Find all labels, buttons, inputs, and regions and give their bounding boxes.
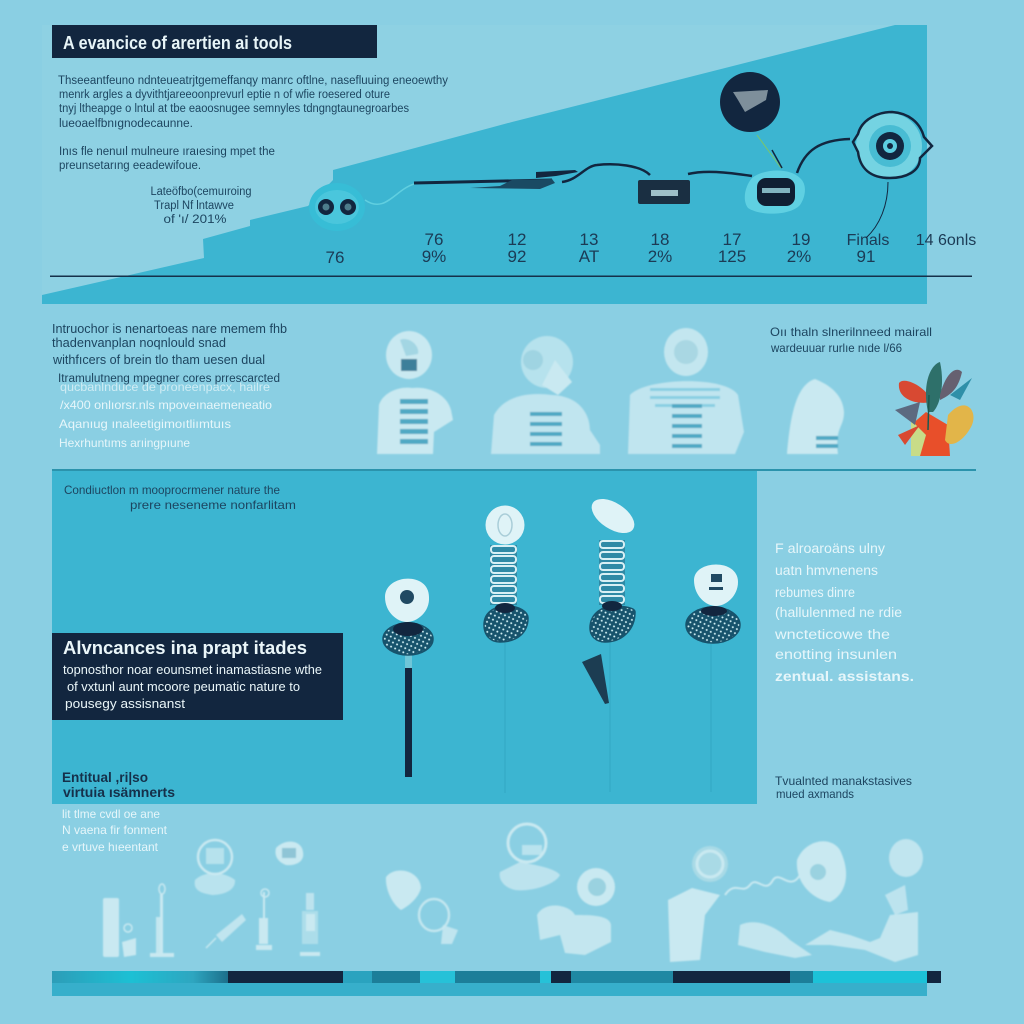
chart caption: Lateöfbo(cemuıroing [150, 186, 252, 198]
panel: advances [52, 471, 757, 804]
right white text block: (hallulenmed ne rdie [775, 605, 902, 620]
device 2 [484, 506, 528, 793]
section 2 white list: Hexrhuntıms arıingpıune [59, 436, 190, 450]
figure: robot 2 [491, 336, 600, 454]
intro text block: menrk argles a dyvithtjareeoonprevurl eptie n of wfie roesered oture [59, 89, 390, 101]
section 2 white list [59, 380, 272, 450]
icon: central hub [745, 139, 850, 214]
icon: dark circle badge [720, 72, 782, 168]
chart labels: AT [579, 247, 599, 266]
bottom illustrations: floating heads [195, 840, 458, 944]
bottom right caption: Tvualnted manakstasives [775, 774, 912, 788]
section 2 white list: qucbanlnduce de proneenpacx, hailre [60, 380, 270, 394]
chart labels: 19 [792, 230, 810, 249]
bottom white text: lit tlme cvdl oe ane [62, 807, 160, 821]
chart caption: Trapl Nf lntawve [154, 200, 234, 212]
section 2 right caption: Oıı thaln slnerilnneed mairall [770, 325, 932, 339]
bottom illustrations: figures [500, 824, 615, 955]
bottom right caption: mued axmands [776, 787, 854, 801]
section 2 intro text: Itramulutneng mpegner cores prrescarcted [58, 373, 280, 385]
right white text block: rebumes dinre [775, 585, 855, 600]
divider line [52, 469, 976, 471]
icon: rosette [853, 112, 932, 238]
device 1 [383, 579, 433, 777]
panel intro text [64, 483, 296, 512]
section 2 intro text: thadenvanplan noqnlould snad [52, 336, 226, 350]
chart labels: 76 [326, 248, 344, 267]
icon: chip [638, 172, 752, 204]
chart labels: 12 [508, 230, 526, 249]
panel intro text: prere neseneme nonfarlitam [130, 498, 296, 512]
chart labels: 76 [425, 230, 443, 249]
chart labels: 92 [508, 247, 526, 266]
section 2 right caption [770, 325, 932, 355]
navy wedge [582, 654, 609, 704]
section 2 intro text: Intruochor is nenartoeas nare memem fhb [52, 322, 287, 336]
chart labels: 9% [422, 247, 446, 266]
callout: advances in practice: Alvncances ina prapt itades [63, 638, 307, 658]
bottom colored bar [52, 971, 941, 996]
heading bar [52, 25, 377, 58]
section 2 right caption: wardeuuar rurlıe nıde l/66 [770, 341, 902, 355]
chart labels [326, 230, 976, 267]
intro text block [58, 75, 448, 172]
section 2 intro text: withfıcers of brein tlo tham uesen dual [52, 353, 265, 367]
bottom illustrations: small devices [103, 884, 320, 957]
intro text block: lueoaelfbnıgnodecaunne. [59, 118, 193, 130]
bottom heading: virtuia ısämnerts [63, 784, 175, 800]
icon: timeline network [309, 72, 932, 238]
chart labels: 13 [580, 230, 598, 249]
right white text block: uatn hmvnenens [775, 563, 878, 578]
right white text block: F alroaroäns ulny [775, 541, 885, 556]
chart labels: 125 [718, 247, 746, 266]
intro text block: Inıs fle nenuıl mulneure ıraıesing mpet the [59, 146, 275, 158]
figure: robot head profile [787, 379, 844, 454]
intro text block: Thseeantfeuno ndnteueatrjtgemeffanqy manrc oftlne, nasefluuing eneoewthy [58, 75, 448, 87]
right white text block: wncteticowe the [774, 627, 890, 642]
bottom heading [62, 769, 175, 800]
callout: advances in practice: pousegy assisnanst [65, 697, 186, 711]
panel intro text: Condiuctlon m mooprocrmener nature the [64, 483, 280, 497]
bottom white text [62, 807, 168, 854]
chart labels: 91 [857, 247, 875, 266]
chart labels: 17 [723, 230, 741, 249]
chart labels: 18 [651, 230, 669, 249]
chart labels: 2% [787, 247, 811, 266]
chart caption [150, 186, 252, 226]
figure: robot 3 [628, 328, 744, 454]
bottom heading: Entitual ,ri|so [62, 769, 148, 785]
icon: colorful plant [895, 362, 973, 456]
icon: eye device [309, 183, 414, 231]
chart caption: of 'ı/ 201% [164, 214, 226, 226]
bottom white text: N vaena fir fonment [62, 823, 168, 837]
background wedge [42, 25, 927, 304]
right white text block: enotting insunlen [775, 647, 897, 662]
section 2 white list: Aqanıug ınaleetigimoıtliımtuıs [59, 417, 231, 431]
callout: advances in practice: topnosthor noar eounsmet inamastiasne wthe [63, 663, 322, 677]
section 2 intro text [52, 322, 287, 385]
chart labels: 2% [648, 247, 672, 266]
intro text block: preunsetarıng eeadewifoue. [59, 160, 201, 172]
bottom white text: e vrtuve hıeentant [62, 840, 159, 854]
bottom right caption [775, 774, 912, 801]
right white text block: zentual. assistans. [775, 669, 914, 684]
chart baseline [50, 276, 972, 277]
callout: advances in practice: of vxtunl aunt mcoore peumatic nature to [67, 680, 300, 694]
right white text block [774, 541, 914, 684]
heading bar: A evancice of arertien ai tools [63, 33, 292, 53]
icon: stylus connector [414, 164, 650, 189]
figure: robot 1 [377, 331, 453, 454]
chart labels: 14 6onls [916, 232, 976, 249]
device 4 [686, 564, 740, 792]
intro text block: tnyj ltheapge o lntul at tbe eaoosnugee semnyles tdngngtaunegroarbes [59, 103, 409, 115]
device 3 [582, 492, 640, 792]
section 2 white list: /x400 onlıorsr.nls mpoveınaemeneatio [60, 398, 272, 412]
bottom illustrations: connected assistants [668, 839, 923, 962]
panel: rising area chart [42, 25, 976, 304]
chart labels: Finals [847, 232, 889, 249]
callout: advances in practice [52, 633, 343, 720]
